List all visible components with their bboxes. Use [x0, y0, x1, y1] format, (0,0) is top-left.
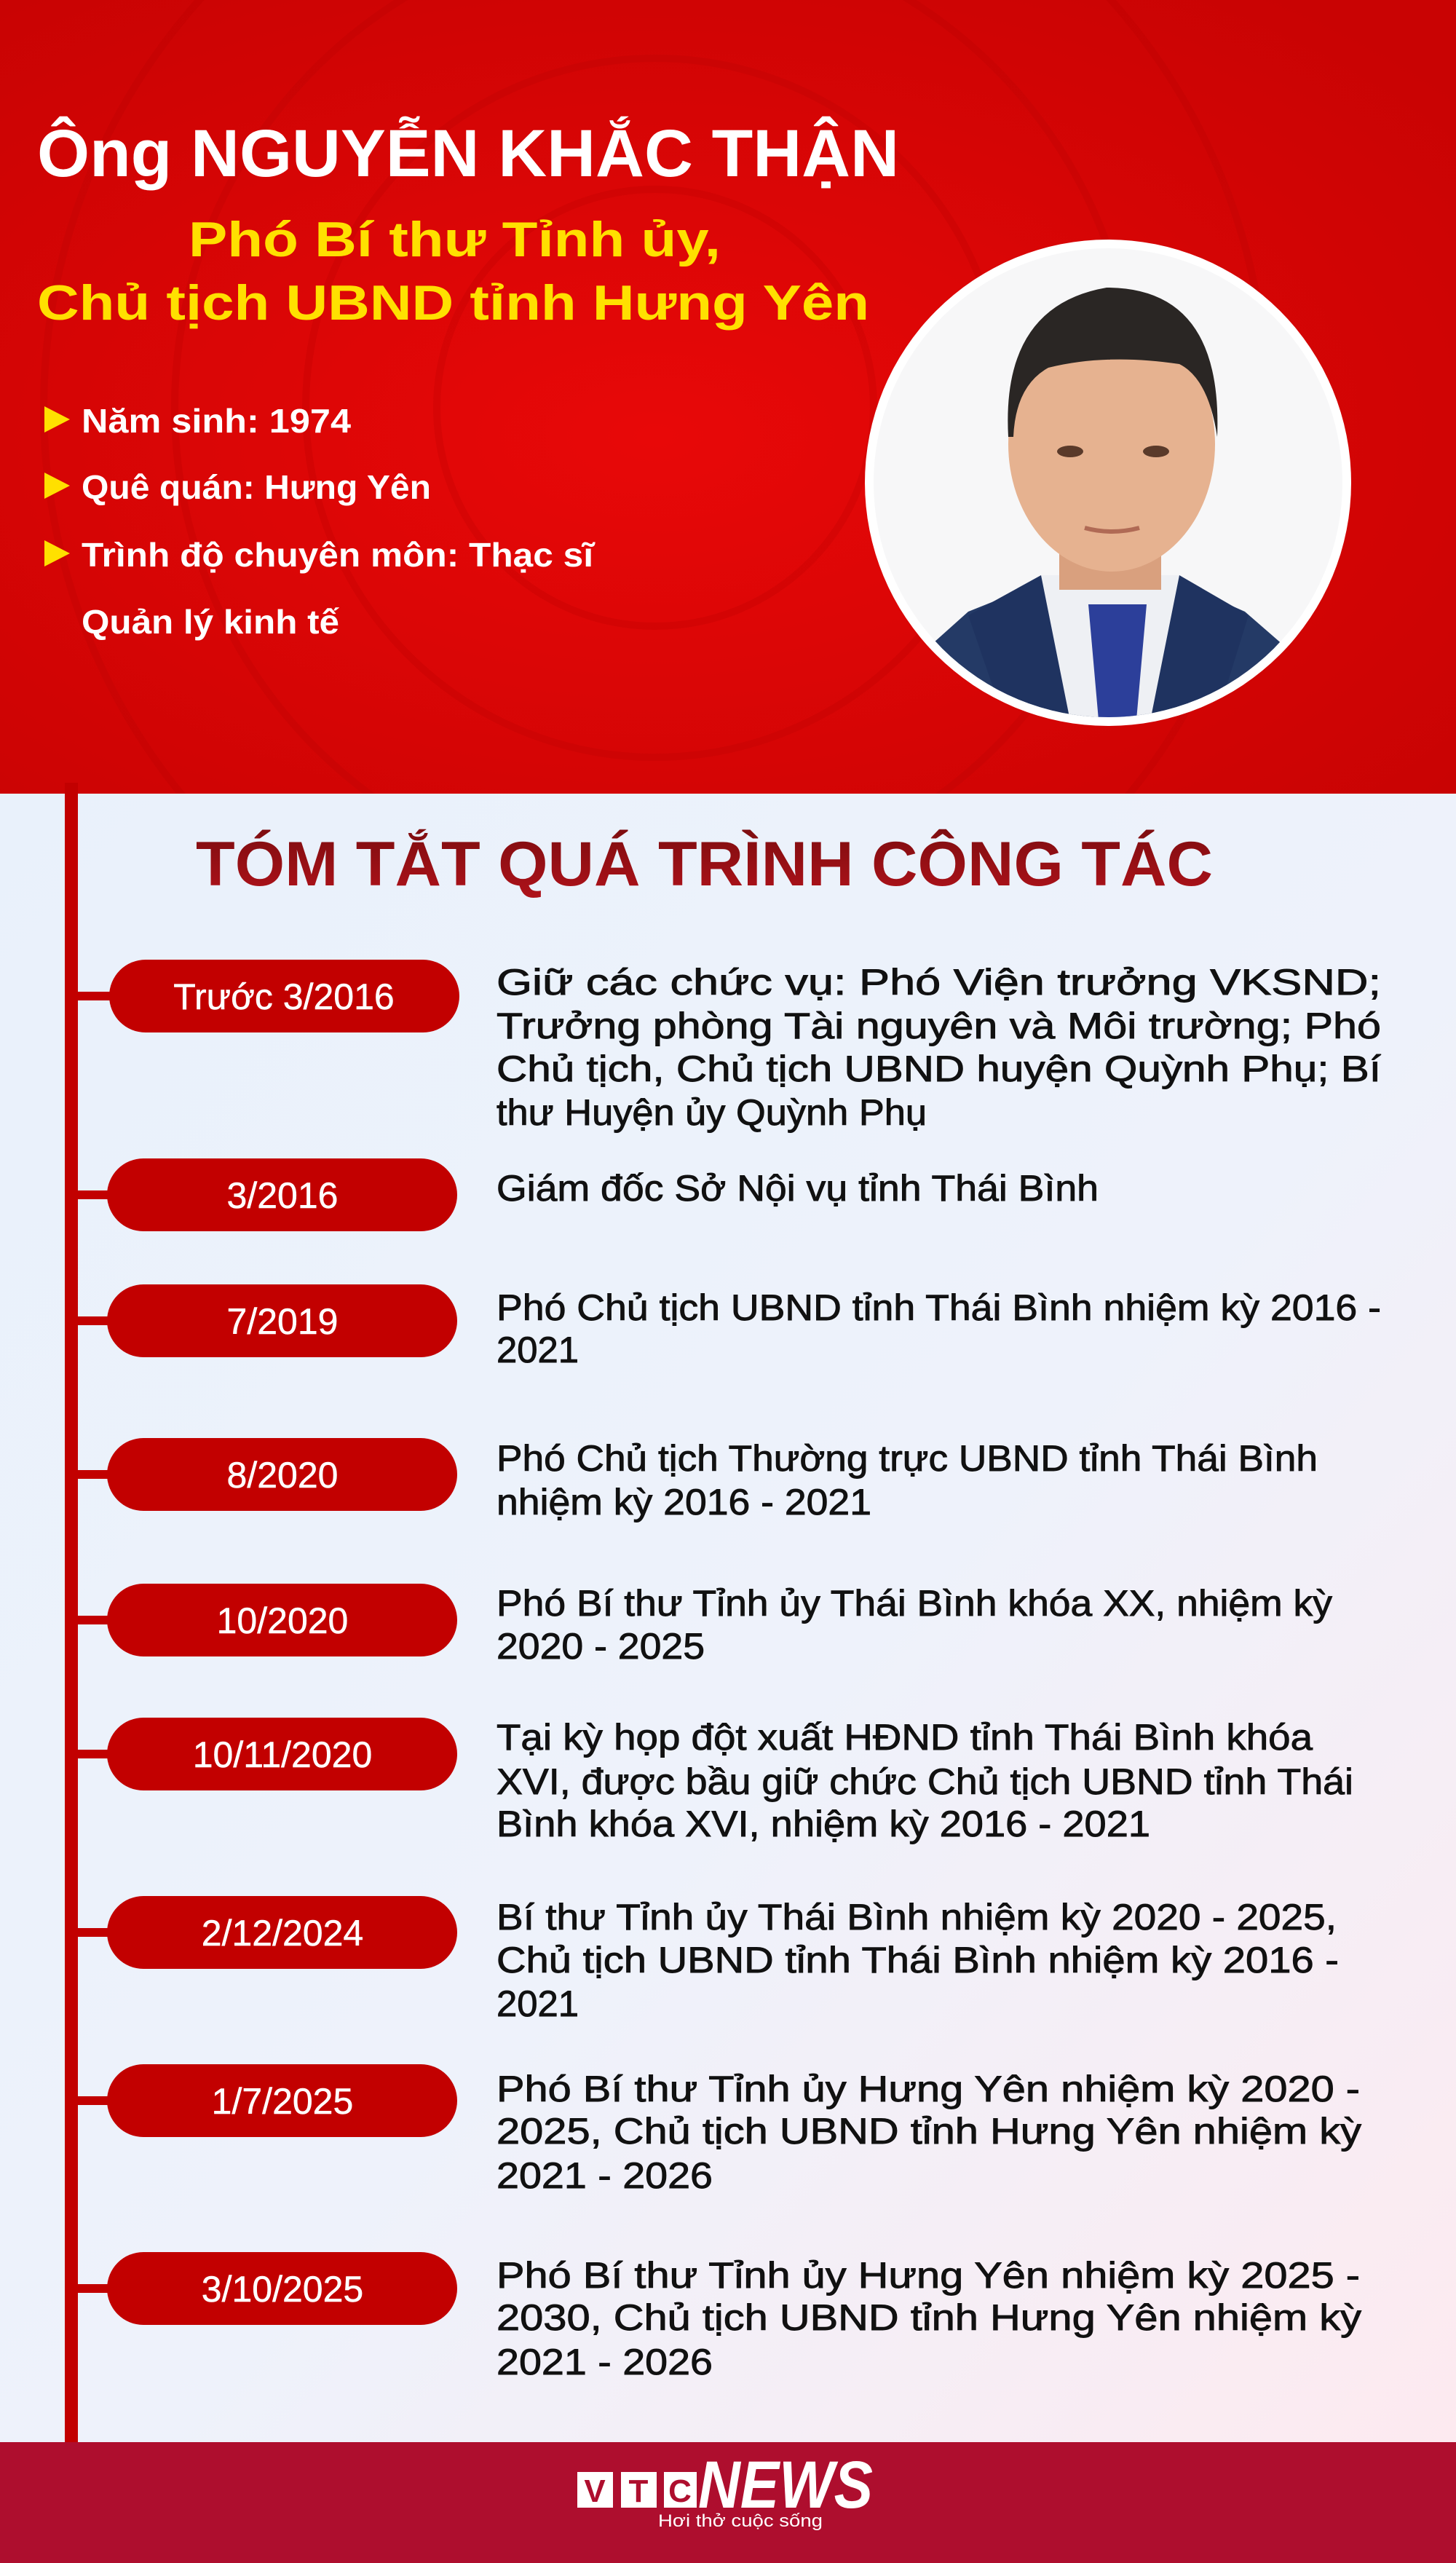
entry: 10/11/2020	[73, 1717, 1353, 1844]
entry: 10/11/2020: 10/11/2020	[193, 1734, 372, 1775]
entry: 7/2019	[73, 1284, 1381, 1370]
entry: 10/2020	[73, 1583, 1332, 1667]
entry: 3/10/2025: 3/10/2025	[202, 2269, 363, 2310]
entry: 2/12/2024	[73, 1896, 1339, 2024]
bio bullets: Quê quán: Hưng Yên	[82, 468, 431, 506]
entry: 3/2016: Giám đốc Sở Nội vụ tỉnh Thái Bình	[496, 1168, 1099, 1209]
logo: VTC NEWS	[577, 2448, 873, 2531]
subtitle: Phó Bí thư Tỉnh ủy,	[189, 212, 721, 267]
logo: VTC NEWS: NEWS	[698, 2448, 873, 2522]
entry: 2/12/2024: Chủ tịch UBND tỉnh Thái Bình nhiệm kỳ 2016 -	[496, 1940, 1339, 1980]
entry: 8/2020: 8/2020	[227, 1455, 338, 1496]
entry: 10/11/2020: Tại kỳ họp đột xuất HĐND tỉnh Thái Bình khóa	[496, 1717, 1313, 1758]
section heading: TÓM TẮT QUÁ TRÌNH CÔNG TÁC	[196, 829, 1213, 899]
entry: 2/12/2024: 2/12/2024	[202, 1913, 363, 1954]
entry: 7/2019: Phó Chủ tịch UBND tỉnh Thái Bình nhiệm kỳ 2016 -	[496, 1287, 1381, 1328]
entry: 10/11/2020: XVI, được bầu giữ chức Chủ tịch UBND tỉnh Thái	[496, 1761, 1353, 1802]
entry: 10/2020: Phó Bí thư Tỉnh ủy Thái Bình khóa XX, nhiệm kỳ	[496, 1583, 1332, 1624]
entry: 1/7/2025: 1/7/2025	[212, 2081, 353, 2122]
entry: 8/2020: Phó Chủ tịch Thường trực UBND tỉnh Thái Bình	[496, 1438, 1318, 1479]
entry: 3/10/2025	[73, 2252, 1361, 2382]
subtitle	[37, 212, 869, 331]
entry: 3/2016: 3/2016	[227, 1175, 338, 1216]
timeline entries	[73, 960, 1381, 2382]
entry: 8/2020: nhiệm kỳ 2016 - 2021	[496, 1482, 871, 1523]
footer	[0, 2442, 1456, 2563]
logo: VTC NEWS: T	[629, 2473, 649, 2509]
entry: 3/10/2025: 2021 - 2026	[496, 2342, 713, 2382]
logo: VTC NEWS: V	[584, 2473, 606, 2509]
entry: Trước 3/2016: Trưởng phòng Tài nguyên và Môi trường; Phó	[496, 1006, 1381, 1046]
entry: 2/12/2024: 2021	[496, 1983, 579, 2024]
entry: 3/10/2025: Phó Bí thư Tỉnh ủy Hưng Yên nhiệm kỳ 2025 -	[496, 2255, 1360, 2296]
entry: Trước 3/2016: thư Huyện ủy Quỳnh Phụ	[496, 1092, 927, 1133]
portrait photo	[865, 240, 1351, 728]
entry: 7/2019: 2021	[496, 1330, 579, 1370]
bio bullets: Quản lý kinh tế	[82, 603, 339, 641]
title: Ông NGUYỄN KHẮC THẬN	[37, 115, 899, 191]
entry: 1/7/2025: Phó Bí thư Tỉnh ủy Hưng Yên nhiệm kỳ 2020 -	[496, 2069, 1360, 2109]
entry: 7/2019: 7/2019	[227, 1301, 338, 1342]
logo: VTC NEWS: C	[668, 2473, 692, 2509]
entry: 10/2020: 2020 - 2025	[496, 1626, 705, 1667]
bio bullets: Năm sinh: 1974	[82, 402, 351, 440]
subtitle: Chủ tịch UBND tỉnh Hưng Yên	[37, 275, 869, 331]
entry: 10/11/2020: Bình khóa XVI, nhiệm kỳ 2016 - 2021	[496, 1804, 1150, 1844]
entry: 10/2020: 10/2020	[217, 1600, 348, 1641]
logo: VTC NEWS: Hơi thở cuộc sống	[658, 2511, 823, 2531]
entry: Trước 3/2016	[73, 960, 1381, 1133]
entry: 1/7/2025: 2025, Chủ tịch UBND tỉnh Hưng Yên nhiệm kỳ	[496, 2111, 1361, 2152]
entry: 1/7/2025	[73, 2064, 1361, 2196]
entry: 3/2016	[73, 1158, 1099, 1231]
entry: 1/7/2025: 2021 - 2026	[496, 2155, 713, 2196]
bio bullets	[44, 402, 596, 641]
lower background	[0, 794, 1456, 2442]
entry: Trước 3/2016: Trước 3/2016	[173, 976, 395, 1017]
entry: 3/10/2025: 2030, Chủ tịch UBND tỉnh Hưng Yên nhiệm kỳ	[496, 2297, 1361, 2338]
header background	[0, 0, 1456, 794]
entry: 8/2020	[73, 1438, 1318, 1523]
bio bullets: Trình độ chuyên môn: Thạc sĩ	[82, 536, 596, 574]
entry: 2/12/2024: Bí thư Tỉnh ủy Thái Bình nhiệm kỳ 2020 - 2025,	[496, 1897, 1337, 1938]
entry: Trước 3/2016: Giữ các chức vụ: Phó Viện trưởng VKSND;	[496, 962, 1381, 1003]
entry: Trước 3/2016: Chủ tịch, Chủ tịch UBND huyện Quỳnh Phụ; Bí	[496, 1048, 1381, 1089]
timeline vertical line	[65, 783, 78, 2444]
